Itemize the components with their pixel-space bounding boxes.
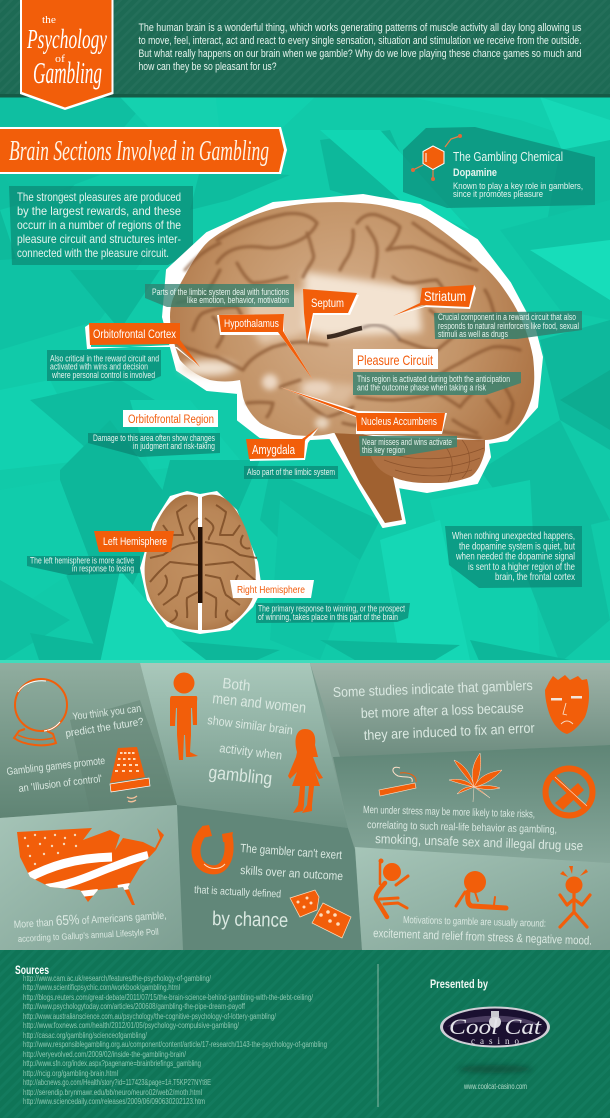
- sources list: http://www.australianscience.com.au/psychology/the-cognitive-psychology-of-lottery-gambling/: [23, 1012, 277, 1021]
- text: orbitofrontal region: in judgment and risk-taking: [133, 441, 215, 451]
- panel: dopamine signal: is sent to a higher region of the: [468, 562, 575, 573]
- sources list: http://blogs.reuters.com/great-debate/2011/07/15/the-brain-science-behind-gambling-with-the-debt-ceiling/: [23, 993, 314, 1002]
- text: orbitofrontal cortex: Also critical in the reward circuit and: [50, 354, 159, 364]
- label: orbitofrontal cortex: [85, 323, 200, 367]
- brain top view: [140, 491, 262, 634]
- label: striatum: [393, 285, 476, 316]
- panel: dopamine: Dopamine: [453, 167, 497, 179]
- panel: strongest pleasures: [9, 186, 193, 265]
- icon: woman: [288, 729, 323, 813]
- label: pleasure circuit: Pleasure Circuit: [357, 352, 433, 368]
- fact: predict the future: You think you can: [72, 703, 142, 723]
- text: orbitofrontal cortex: activated with wins and decision: [50, 362, 148, 372]
- text: nucleus accumbens: this key region: [362, 445, 405, 455]
- highlights: [262, 374, 331, 429]
- panel: dopamine: The Gambling Chemical: [453, 149, 563, 164]
- icon: crystal ball: [14, 679, 67, 745]
- intro text: [138, 22, 582, 73]
- cerebellum: [363, 437, 485, 483]
- title banner: the: [42, 14, 56, 26]
- fact: motivations: [373, 858, 592, 948]
- fact: stress and risks: [363, 753, 592, 853]
- logo: Cool Cat casino: Cool Cat: [449, 1014, 542, 1039]
- text: striatum: stimuli as well as drugs: [438, 329, 508, 339]
- fact: predict the future: predict the future?: [65, 716, 145, 740]
- icon: tired figure: [456, 871, 506, 908]
- fact: fix an error: they are induced to fix an error: [363, 720, 535, 743]
- text: orbitofrontal cortex: where personal control is involved: [51, 370, 155, 380]
- panel: dopamine signal: [445, 526, 582, 588]
- dark central fissure: [327, 325, 400, 340]
- sources list: http://veryevolved.com/2009/02/inside-the-gambling-brain/: [23, 1050, 187, 1059]
- gyri: [177, 213, 520, 438]
- text: pleasure circuit: and the outcome phase when taking a risk: [357, 382, 486, 392]
- text: striatum: [434, 311, 582, 339]
- sources list: http://ncig.org/gambling-brain.html: [23, 1069, 118, 1078]
- text: amygdala: [244, 466, 338, 479]
- fact: stress and risks: correlating to such real-life behavior as gambling,: [367, 819, 557, 836]
- brain stem: [333, 430, 402, 523]
- sources list: http://www.foxnews.com/health/2012/01/05/psychology-compulsive-gambling/: [23, 1021, 240, 1030]
- icon: USA flag map: [17, 828, 164, 905]
- fact: by chance: by chance: [212, 908, 288, 932]
- top view folds right: [205, 505, 257, 622]
- fact: stress and risks: smoking, unsafe sex and illegal drug use: [375, 831, 583, 853]
- label: limbic text: Parts of the limbic system deal with functions: [152, 287, 289, 297]
- text: nucleus accumbens: Near misses and wins activate: [362, 437, 452, 447]
- fact: stress and risks: Men under stress may be more likely to take risks,: [363, 804, 535, 821]
- title banner: of: [55, 53, 65, 65]
- fact: fix an error: [333, 675, 589, 743]
- text: pleasure circuit: [353, 372, 521, 395]
- label: limbic text: like emotion, behavior, motivation: [187, 295, 289, 305]
- label: orbitofrontal region: [123, 410, 218, 427]
- label: nucleus accumbens: [280, 387, 447, 434]
- panel: dopamine signal: brain, the frontal cortex: [495, 572, 575, 583]
- fact: fix an error: Some studies indicate that gamblers: [333, 677, 533, 700]
- text: left hemisphere: [27, 556, 140, 575]
- sources list: http://abcnews.go.com/Health/story?id=117423&page=1#.T5KP27NYt8E: [23, 1078, 211, 1087]
- fact: men and women: show similar brain: [207, 713, 294, 737]
- fact: illusion of control: [6, 747, 150, 802]
- sources list: Sources: [15, 965, 49, 977]
- text: amygdala: Also part of the limbic system: [247, 467, 335, 477]
- panel: dopamine signal: When nothing unexpected happens,: [452, 531, 575, 542]
- panel: strongest pleasures: pleasure circuit and structures inter-: [17, 232, 181, 246]
- sources list: http://casac.org/gambling/scienceofgambling/: [23, 1031, 148, 1040]
- icon: horseshoe: [196, 825, 233, 870]
- panel: strongest pleasures: occurr in a number of regions of the: [17, 218, 181, 232]
- label: amygdala: [246, 427, 319, 461]
- section heading banner: Brain Sections Involved in Gambling: [9, 136, 269, 167]
- fact: americans gamble: More than 65% of Americans gamble,: [13, 906, 167, 931]
- sources list: http://www.psychologytoday.com/articles/200608/gambling-the-pipe-dream-payoff: [23, 1002, 246, 1011]
- label: septum: Septum: [311, 298, 344, 310]
- fact: illusion of control: an 'Illusion of control': [18, 773, 103, 795]
- sources list: http://www.responsiblegambling.org.au/component/content/article/17-research/1143-the-psychology-of-gambling: [23, 1040, 327, 1049]
- logo: Cool Cat casino: [440, 1006, 550, 1073]
- icon: excited figure: [376, 858, 408, 917]
- sources list: http://www.cam.ac.uk/research/features/the-psychology-of-gambling/: [23, 974, 212, 983]
- sources list: http://serendip.brynmawr.edu/bb/neuro/neuro02/web2/moth.html: [23, 1088, 202, 1097]
- fact: americans gamble: [14, 828, 166, 942]
- pale central region: [180, 272, 422, 405]
- text: left hemisphere: in response to losing: [72, 564, 134, 574]
- text: orbitofrontal region: [88, 433, 220, 457]
- panel: dopamine: Known to play a key role in gamblers,: [453, 181, 583, 192]
- panel: strongest pleasures: The strongest pleasures are produced: [17, 190, 181, 204]
- intro text: how can they be so pleasant for us?: [138, 61, 276, 73]
- label: left hemisphere: [94, 531, 174, 552]
- title banner: Psychology: [26, 24, 107, 54]
- icon: dice: [290, 890, 351, 938]
- label: pleasure circuit: [353, 349, 438, 369]
- fact: motivations: Motivations to gamble are usually around:: [403, 915, 546, 930]
- footer background: [0, 950, 610, 1118]
- icon: cannabis leaf: [449, 753, 502, 802]
- website url: www.coolcat-casino.com: [463, 1082, 527, 1091]
- fact: men and women: gambling: [208, 762, 273, 789]
- title banner: Gambling: [33, 55, 102, 90]
- icon: dopamine molecule: [411, 134, 462, 181]
- label: right hemisphere: [230, 580, 314, 598]
- fact: men and women: activity when: [219, 741, 283, 763]
- label: hypothalamus: [217, 314, 313, 380]
- sources list: http://www.sciencedaily.com/releases/2009/06/090630202123.htm: [23, 1097, 205, 1106]
- icon: slot machine: [110, 747, 150, 802]
- fact: men and women: men and women: [212, 690, 307, 717]
- label: amygdala: Amygdala: [252, 442, 296, 457]
- label: nucleus accumbens: Nucleus Accumbens: [361, 416, 437, 428]
- text: right hemisphere: of winning, takes place in this part of the brain: [258, 612, 398, 622]
- fact: americans gamble: according to Gallup's annual Lifestyle Poll: [18, 927, 159, 944]
- text: right hemisphere: The primary response to winning, or the prospect: [258, 604, 405, 614]
- panel: dopamine: since it promotes pleasure: [453, 189, 543, 200]
- panel: dopamine signal: when needed the dopamine signal: [455, 552, 575, 562]
- label: striatum: Striatum: [424, 289, 466, 304]
- fact: illusion of control: Gambling games promote: [6, 755, 106, 778]
- presented by heading: Presented by: [430, 977, 488, 991]
- top view folds left: [150, 505, 198, 622]
- text: orbitofrontal region: Damage to this area often show changes: [93, 433, 215, 443]
- label: septum: [303, 289, 359, 344]
- logo: Cool Cat casino: casino: [471, 1036, 520, 1046]
- text: right hemisphere: [256, 603, 410, 623]
- fact: men and women: [170, 672, 323, 813]
- text: orbitofrontal cortex: [47, 350, 161, 381]
- header band: [0, 0, 610, 98]
- sources list: [15, 965, 327, 1106]
- title banner: [20, 0, 114, 110]
- sources list: http://www.scientificpsychic.com/workbook/gambling.html: [23, 983, 180, 992]
- cerebrum: [170, 202, 534, 440]
- brain side view: [163, 195, 542, 527]
- fact: fix an error: bet more after a loss because: [361, 699, 524, 721]
- panel: strongest pleasures: by the largest rewards, and these: [17, 204, 181, 218]
- fact: by chance: that is actually defined: [194, 884, 281, 901]
- label: orbitofrontal cortex: Orbitofrontal Cortex: [93, 327, 176, 341]
- icon: no smoking sign: [546, 768, 592, 816]
- icon: sad face: [545, 675, 589, 734]
- fact: by chance: The gambler can't exert: [240, 841, 343, 862]
- text: nucleus accumbens: [359, 436, 457, 456]
- sources list: http://www.sfn.org/index.aspx?pagename=brainbriefings_gambling: [23, 1059, 201, 1068]
- text: left hemisphere: The left hemisphere is more active: [30, 556, 134, 566]
- text: pleasure circuit: This region is activated during both the anticipation: [357, 374, 510, 384]
- fact: men and women: Both: [222, 675, 251, 695]
- section heading banner: [0, 127, 287, 174]
- label: left hemisphere: Left Hemisphere: [103, 536, 167, 548]
- fact: by chance: [194, 825, 351, 938]
- grey facts panel background: [0, 660, 610, 950]
- teal polygon background: [0, 90, 610, 663]
- fact: by chance: skills over an outcome: [240, 863, 344, 883]
- panel: dopamine: [403, 127, 595, 208]
- icon: cigarette: [379, 767, 416, 796]
- panel: strongest pleasures: connected with the pleasure circuit.: [17, 246, 169, 260]
- fact: predict the future: [14, 679, 145, 745]
- label: orbitofrontal region: Orbitofrontal Region: [128, 414, 214, 426]
- label: limbic text: [145, 284, 294, 307]
- icon: stressed figure: [560, 866, 590, 927]
- panel: dopamine signal: the dopamine system is quiet, but: [459, 542, 575, 552]
- label: right hemisphere: Right Hemisphere: [237, 584, 305, 596]
- label: hypothalamus: Hypothalamus: [224, 318, 279, 330]
- icon: man: [170, 672, 198, 760]
